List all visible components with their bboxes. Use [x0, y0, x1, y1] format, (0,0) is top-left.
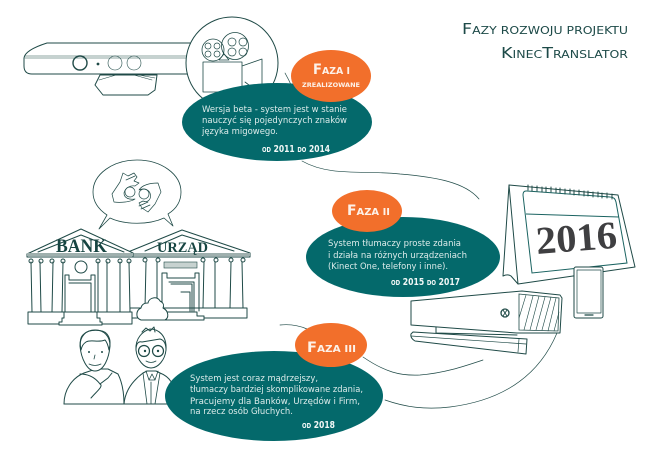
icon: urząd building — [128, 230, 250, 320]
icon: kinect one sensor — [411, 291, 562, 354]
icon: smartphone — [574, 267, 603, 318]
phase III text: Pracujemy dla Banków, Urzędów i Firm, — [190, 396, 360, 407]
icon: kinect sensor — [24, 43, 195, 95]
icon: desk calendar 2016: 2016 — [534, 214, 618, 263]
phase I text: Wersja beta - system jest w stanie — [202, 104, 347, 115]
phase II text — [328, 238, 467, 288]
connector curves — [280, 73, 557, 408]
icon: man with hoodie — [64, 330, 172, 404]
icon: man with glasses — [124, 327, 178, 404]
phase II text: System tłumaczy proste zdania — [328, 238, 461, 249]
phase I text — [201, 104, 347, 155]
phase II text: (Kinect One, telefony i inne). — [328, 261, 448, 272]
phase III text — [190, 373, 363, 431]
badge: phase III: FAZA III — [307, 340, 356, 356]
phase III text: System jest coraz mądrzejszy, — [190, 373, 318, 384]
phase III text: OD 2018 — [302, 420, 335, 431]
badge: phase III — [295, 323, 367, 367]
badge: phase I: ZREALIZOWANE — [302, 82, 360, 89]
phase III text: tłumaczy bardziej skomplikowane zdania, — [190, 384, 363, 395]
badge: phase II — [332, 190, 402, 232]
badge: phase I — [291, 50, 371, 102]
phase II text: OD 2015 DO 2017 — [391, 277, 460, 288]
icon: urząd building: URZĄD — [157, 240, 208, 256]
title: FAZY ROZWOJU PROJEKTU — [462, 20, 628, 38]
icon: bank building: BANK — [56, 236, 107, 257]
panel: phase III ellipse — [165, 351, 383, 441]
phase I text: nauczyć się pojedynczych znaków — [202, 115, 347, 126]
phase II text: i działa na różnych urządzeniach — [328, 250, 467, 261]
phase I text: OD 2011 DO 2014 — [262, 144, 330, 155]
icon: speech bubble with signing hands — [93, 160, 181, 229]
phase I text: języka migowego. — [201, 126, 278, 137]
panel: phase I ellipse — [182, 83, 372, 161]
badge: phase II: FAZA II — [347, 203, 390, 219]
icon: desk calendar 2016 — [503, 185, 635, 284]
icon: bank building — [27, 229, 133, 325]
phase III text: na rzecz osób Głuchych. — [190, 406, 293, 417]
title — [462, 20, 628, 62]
icon: bush — [137, 298, 168, 320]
title: KINECTRANSLATOR — [501, 44, 628, 62]
icon: film camera in circle — [186, 17, 278, 109]
badge: phase I: FAZA I — [313, 62, 350, 78]
panel: phase II ellipse — [306, 217, 500, 297]
